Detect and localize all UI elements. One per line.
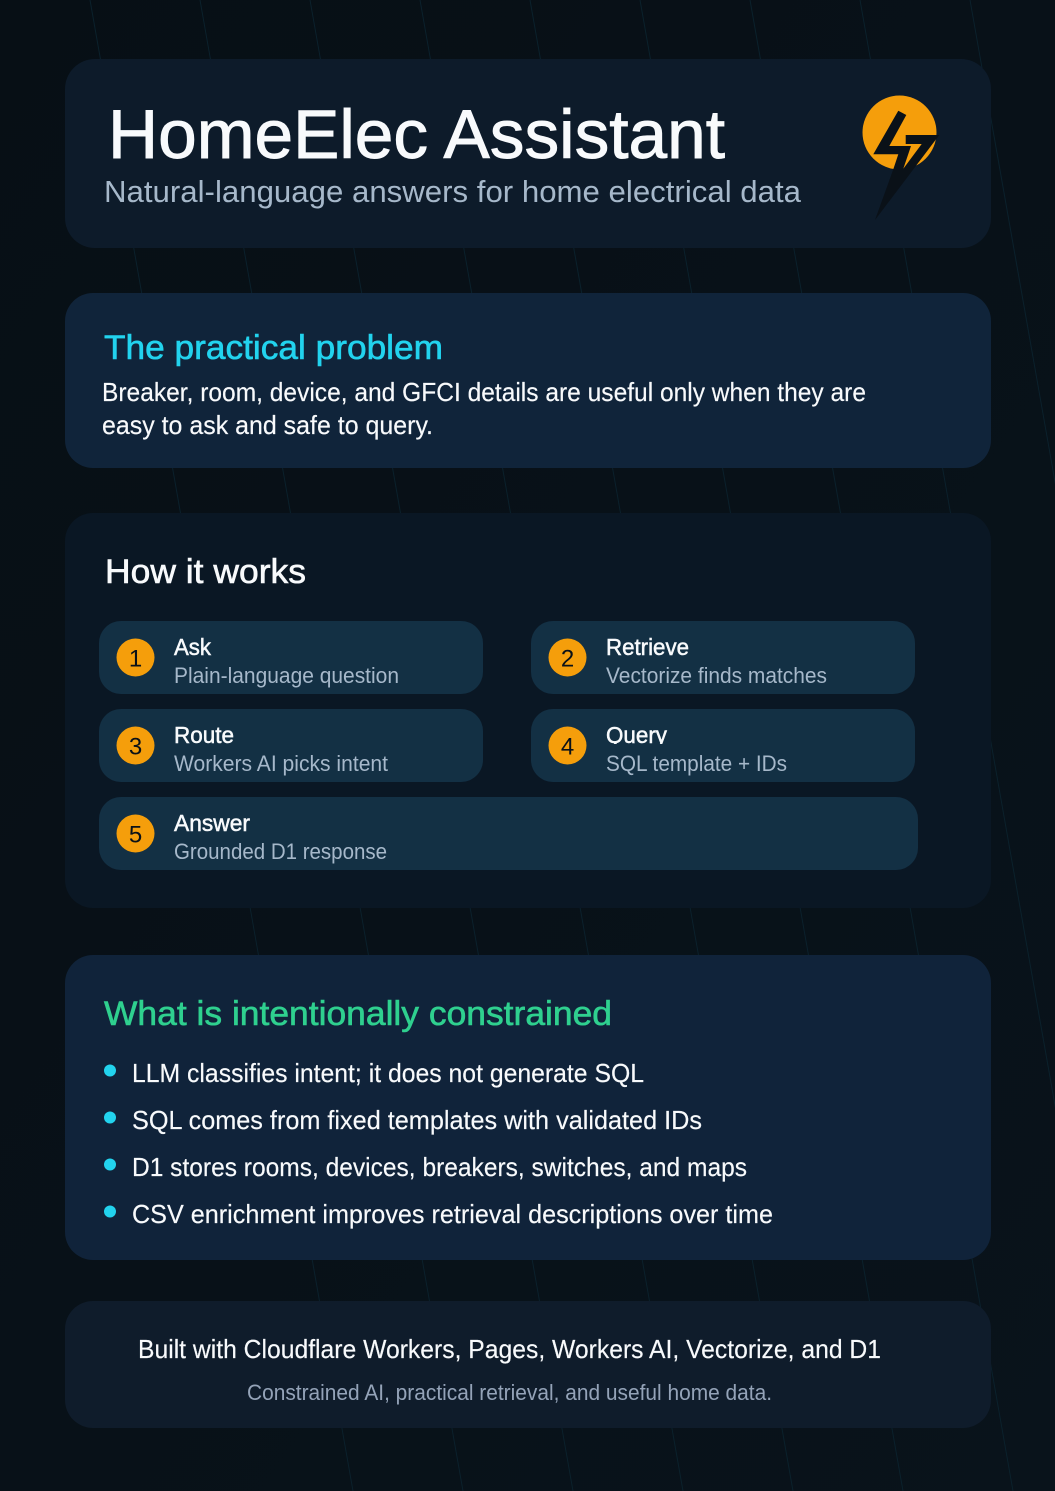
icon: lightning bolt <box>862 96 939 220</box>
step 1: ask: Plain-language question <box>174 663 399 688</box>
panel: how it works <box>65 513 991 908</box>
bullet 2: SQL comes from fixed templates with validated IDs <box>132 1105 702 1135</box>
step 4: query: Query <box>606 722 667 748</box>
problem description <box>102 377 866 440</box>
subtitle: Natural-language answers for home electrical data <box>104 174 802 209</box>
bullet 4: CSV enrichment improves retrieval descriptions over time <box>132 1199 773 1229</box>
panel: footer <box>65 1301 991 1428</box>
step 2: retrieve: Retrieve <box>606 634 689 660</box>
title: HomeElec Assistant <box>108 96 725 173</box>
panel: header <box>65 59 991 248</box>
step 2: retrieve: Vectorize finds matches <box>606 663 827 688</box>
problem description: easy to ask and safe to query. <box>102 410 433 440</box>
step 5: answer <box>99 797 918 870</box>
footer built-with line: Built with Cloudflare Workers, Pages, Workers AI, Vectorize, and D1 <box>138 1334 881 1364</box>
step 1: ask <box>99 621 483 694</box>
step 3: route: 3 <box>129 734 142 760</box>
step 1: ask: Ask <box>174 634 211 660</box>
step 3: route: Workers AI picks intent <box>174 751 388 776</box>
heading: how it works: How it works <box>105 553 306 591</box>
panel: what is intentionally constrained <box>65 955 991 1260</box>
step 4: query: SQL template + IDs <box>606 751 787 776</box>
step 4: query <box>531 709 915 782</box>
step 4: query: 4 <box>561 734 574 760</box>
step 2: retrieve: 2 <box>561 646 574 672</box>
step 5: answer: Grounded D1 response <box>174 839 387 864</box>
step 5: answer: 5 <box>129 822 142 848</box>
heading: what is intentionally constrained: What is intentionally constrained <box>104 995 612 1033</box>
panel: the practical problem <box>65 293 991 468</box>
step 3: route: Route <box>174 722 234 748</box>
step 5: answer: Answer <box>174 810 250 836</box>
step 3: route <box>99 709 483 782</box>
step 2: retrieve <box>531 621 915 694</box>
bullet 1: LLM classifies intent; it does not generate SQL <box>132 1058 644 1088</box>
heading: the practical problem: The practical problem <box>104 329 443 367</box>
problem description: Breaker, room, device, and GFCI details are useful only when they are <box>102 377 866 407</box>
bullet 3: D1 stores rooms, devices, breakers, switches, and maps <box>132 1152 747 1182</box>
footer tagline: Constrained AI, practical retrieval, and useful home data. <box>247 1380 772 1405</box>
step 1: ask: 1 <box>129 646 142 672</box>
